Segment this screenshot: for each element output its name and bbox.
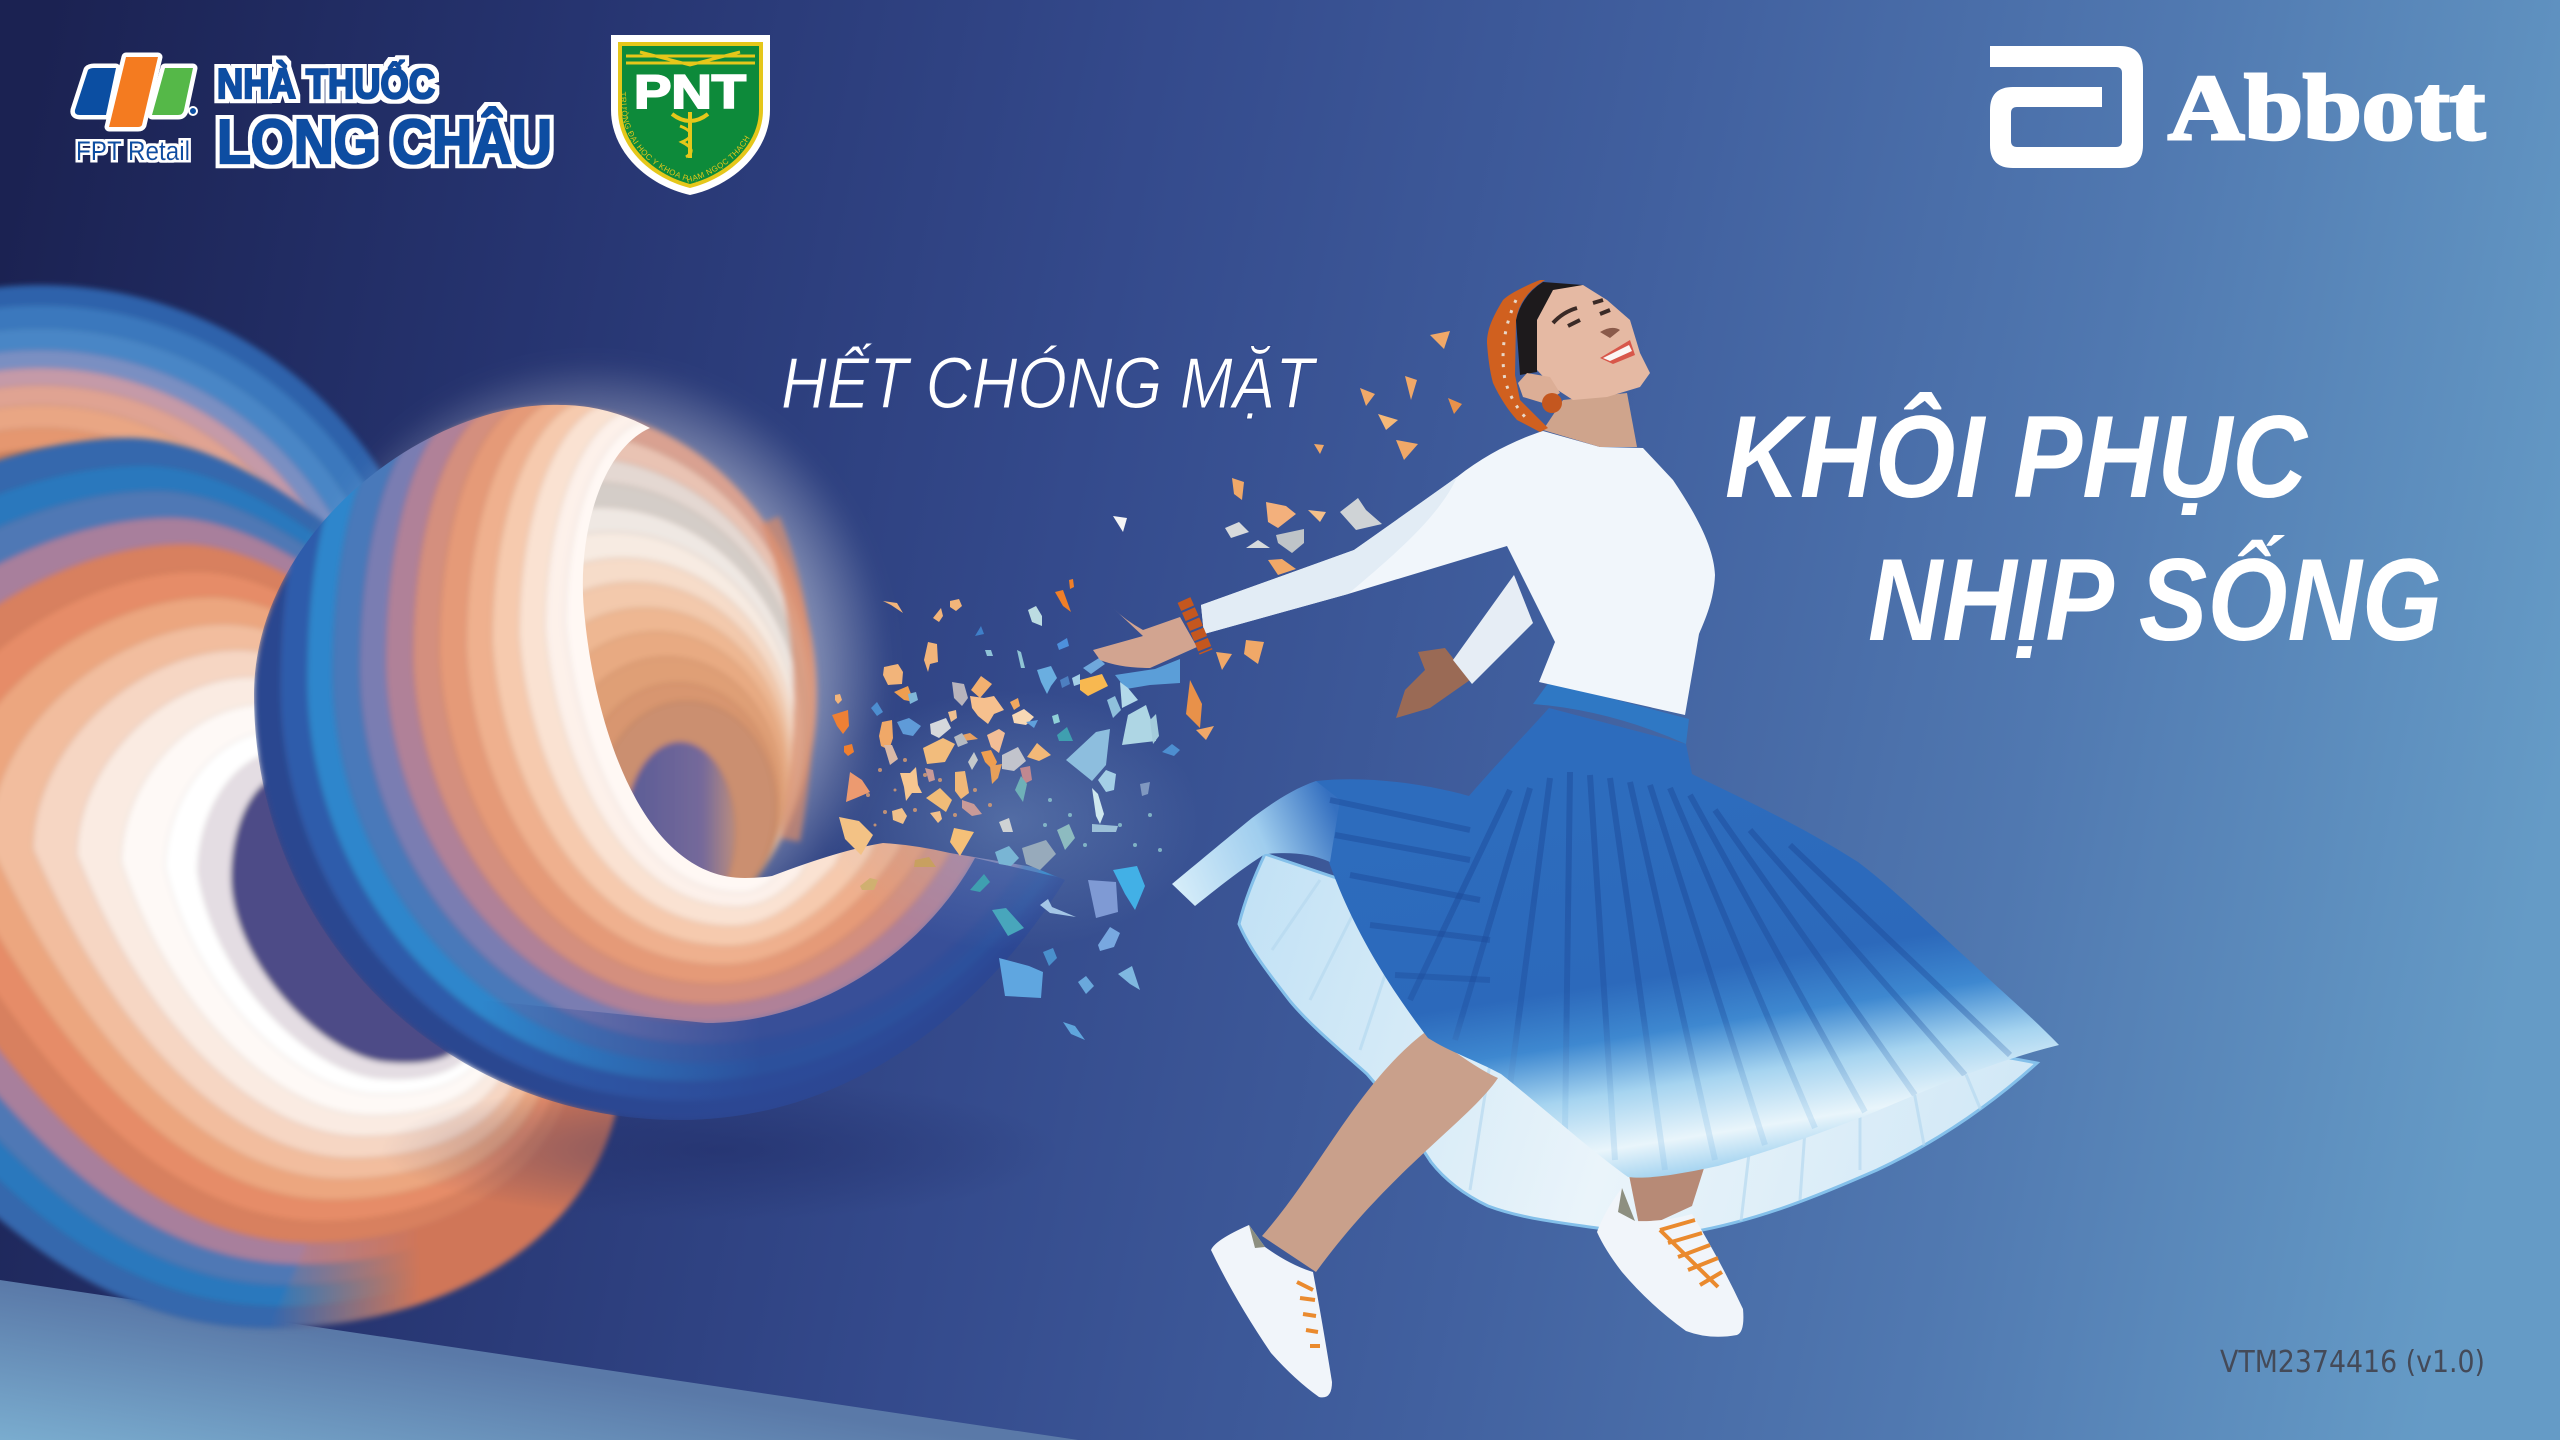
shadow below main loop xyxy=(380,1080,1060,1220)
smile xyxy=(1600,340,1635,364)
logo: Abbott: Abbott xyxy=(2168,57,2485,160)
heading: khoi phuc nhip song xyxy=(1725,391,2442,665)
upper fragments xyxy=(1113,331,1462,740)
floor wedge bottom left xyxy=(0,1280,1078,1440)
logo: PNT shield: PNT xyxy=(634,65,746,118)
main front band with tail xyxy=(254,404,1064,1120)
back hand xyxy=(1396,648,1470,718)
dust particles xyxy=(866,758,1162,852)
swirl artwork xyxy=(0,285,1100,1328)
ear with earring xyxy=(1518,373,1560,403)
white halo behind main loop xyxy=(290,360,890,980)
shattered fragments xyxy=(832,331,1462,1040)
document code: VTM2374416 (v1.0) xyxy=(2220,1345,2485,1380)
logo: Nha thuoc Long Chau: LONG CHÂU xyxy=(217,108,552,177)
waistband xyxy=(1533,682,1689,744)
heading: khoi phuc nhip song: NHỊP SỐNG xyxy=(1868,534,2442,665)
big back loop xyxy=(0,438,621,1328)
woman jumping xyxy=(1093,280,2059,1397)
dust cloud xyxy=(820,690,1200,950)
logo: Nha thuoc Long Chau xyxy=(217,59,552,177)
heading: khoi phuc nhip song: KHÔI PHỤC xyxy=(1725,391,2308,522)
skirt under layer xyxy=(1239,854,2037,1232)
skirt left flap xyxy=(1172,781,1340,906)
front leg xyxy=(1262,1030,1498,1272)
inner funnel of main loop xyxy=(293,407,817,983)
skirt over layer with pleats xyxy=(1172,708,2059,1178)
headband dots xyxy=(1503,300,1530,422)
logo: FPT Retail xyxy=(75,57,197,166)
back sleeve xyxy=(1453,575,1533,684)
logo: Abbott xyxy=(1990,46,2485,168)
sleeve shading xyxy=(1201,477,1457,634)
blue and teal fragments xyxy=(871,626,1180,1040)
orange cluster fragments xyxy=(832,579,1108,890)
headband xyxy=(1487,280,1548,432)
right shoe xyxy=(1597,1188,1743,1337)
back leg xyxy=(1628,1165,1705,1230)
back upper ribbon xyxy=(0,285,445,1095)
logo: FPT Retail: FPT Retail xyxy=(76,136,190,166)
white top with arm xyxy=(1201,431,1715,715)
logo: Nha thuoc Long Chau: NHÀ THUỐC xyxy=(217,59,435,107)
logo: PNT shield: TRƯỜNG ĐẠI HỌC Y KHOA PHẠM NGỌC THẠCH xyxy=(622,92,750,183)
face xyxy=(1537,285,1650,400)
hair xyxy=(1516,282,1583,375)
logo: PNT shield xyxy=(611,35,770,195)
neck xyxy=(1543,393,1637,447)
grey fragments xyxy=(930,606,1042,832)
nose xyxy=(1600,328,1620,338)
eyes and brows xyxy=(1553,300,1610,326)
front hand xyxy=(1093,608,1197,668)
bracelet xyxy=(1184,600,1206,652)
heading: het chong mat: HẾT CHÓNG MẶT xyxy=(781,343,1318,424)
left shoe xyxy=(1211,1225,1332,1397)
